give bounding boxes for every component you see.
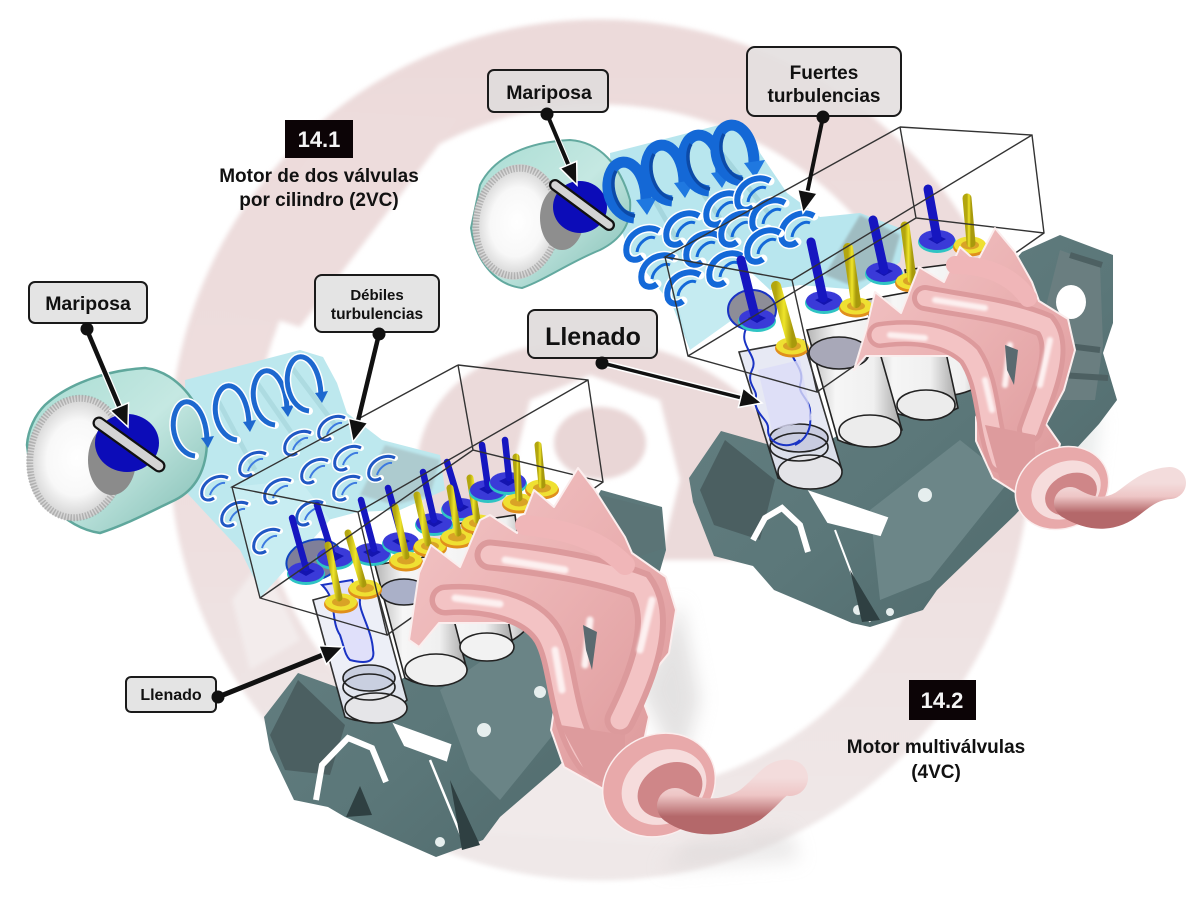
callout: débiles turbulencias: turbulencias [331,306,423,323]
wire box [665,127,1044,392]
manifold shadows [640,340,1100,870]
badge 14.1 [285,120,353,158]
callout: llenado right: Llenado [545,323,641,351]
callout: fuertes turbulencias: Fuertes [790,63,858,84]
watermark logo [212,62,988,850]
swirl arrows [173,357,395,553]
badge 14.2 [909,680,976,720]
badge 14.2: 14.2 [921,688,963,713]
callout: fuertes turbulencias: turbulencias [768,86,880,107]
wire box [232,365,603,635]
exhaust manifold [854,228,1075,492]
throttle body [465,140,630,288]
cylinders [739,262,990,489]
intake plenum [610,123,905,350]
flow column [322,580,373,662]
callout: débiles turbulencias: Débiles [350,287,404,304]
heading: motor de dos válvulas: Motor de dos válvulas [219,166,419,187]
swirl arrows [608,125,814,304]
callout: fuertes turbulencias [747,47,901,213]
flow column [758,360,812,430]
valves [282,440,559,614]
exhaust flange and tail [1002,431,1170,545]
heading: motor multiválvulas: Motor multiválvulas [847,737,1025,758]
exhaust manifold [409,468,676,790]
engine block [689,235,1117,627]
engine 1: two valve [19,350,790,857]
callout: llenado left: Llenado [140,687,202,704]
callout: mariposa right [488,70,608,185]
callout: débiles turbulencias [315,275,439,442]
callout: mariposa right: Mariposa [506,82,592,104]
callout: llenado left [126,646,343,712]
engine 2: multivalve [465,123,1170,627]
cylinders [313,515,530,723]
callout: mariposa left: Mariposa [45,293,131,315]
intake plenum [185,350,445,598]
callout: llenado right [528,310,762,407]
heading line two: (4VC) [911,762,961,783]
engine block [264,490,666,857]
throttle body [19,368,207,533]
heading line two: por cilindro (2VC) [239,190,399,211]
exhaust flange and tail [584,714,790,856]
valves [728,189,987,358]
badge 14.1: 14.1 [298,127,340,152]
callout: mariposa left [29,282,147,427]
